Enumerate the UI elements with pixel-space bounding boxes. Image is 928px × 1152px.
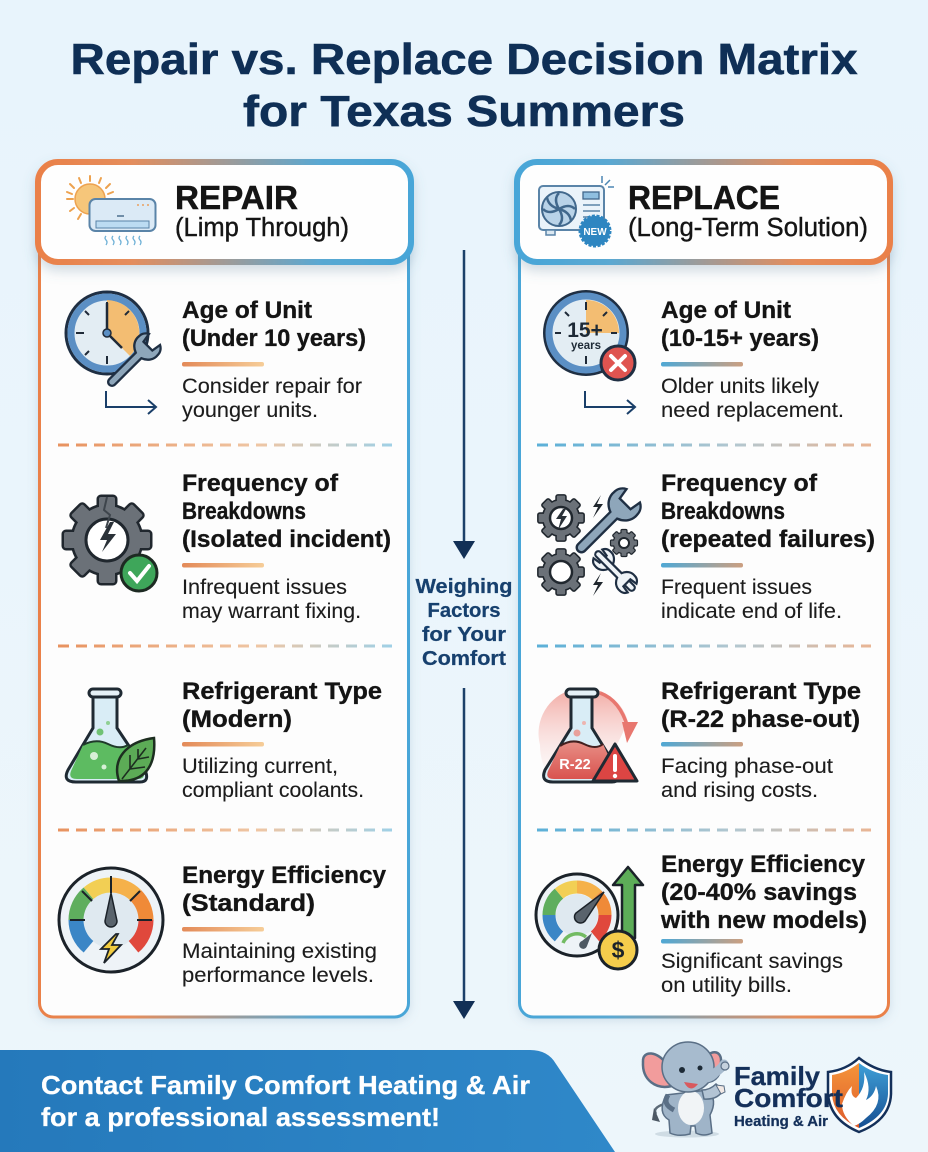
footer banner: Contact Family Comfort Heating & Air — [41, 1070, 530, 1100]
icon: new outdoor unit — [539, 176, 614, 246]
title — [70, 35, 858, 136]
icon: gear with check — [64, 497, 157, 591]
text: refrigerant: (R-22 phase-out) — [661, 706, 860, 733]
text: refrigerant — [661, 678, 861, 802]
text: energy: (Standard) — [182, 890, 315, 917]
text: refrigerant: compliant coolants. — [182, 779, 364, 802]
panel: repair — [38, 162, 411, 1017]
center label — [416, 576, 512, 670]
row: frequency, replace — [539, 470, 875, 623]
text: frequency: Frequency of — [182, 470, 339, 497]
text: age of unit: younger units. — [182, 399, 318, 422]
icon: clock with wrench — [66, 292, 164, 394]
replace heading: REPLACE — [628, 179, 780, 216]
logo wordmark: Family — [734, 1061, 821, 1091]
text: age — [661, 297, 844, 422]
icon: gears and wrenches — [539, 484, 645, 597]
row: age of unit, replace — [543, 290, 844, 422]
text: refrigerant: (Modern) — [182, 706, 292, 733]
replace header card — [517, 162, 890, 262]
text: age of unit: Age of Unit — [182, 297, 312, 324]
row: energy, replace — [536, 851, 867, 997]
icon: gauge with savings — [536, 867, 643, 969]
icon: gauge with savings: $ — [612, 937, 625, 963]
text: age of unit: Consider repair for — [182, 375, 362, 398]
text: frequency — [182, 470, 391, 623]
center label: for Your — [422, 624, 506, 646]
text: age: (10-15+ years) — [661, 325, 819, 352]
text: frequency: indicate end of life. — [661, 600, 842, 623]
elephant mascot — [643, 1042, 729, 1138]
logo shield — [828, 1058, 891, 1132]
repair heading: REPAIR — [175, 179, 298, 216]
center arrow: upper — [453, 250, 475, 559]
text: energy — [182, 862, 386, 987]
row: refrigerant type, repair — [66, 678, 382, 802]
arrow — [106, 391, 156, 414]
center label: Factors — [428, 600, 500, 622]
text: frequency: (repeated failures) — [661, 526, 875, 553]
text: refrigerant: Utilizing current, — [182, 755, 338, 778]
text: energy: with new models) — [660, 907, 867, 934]
icon: R-22 flask with warning — [539, 688, 638, 782]
logo wordmark — [734, 1061, 843, 1130]
title: for Texas Summers — [243, 87, 685, 136]
text: energy: (20-40% savings — [661, 879, 857, 906]
text: energy: Energy Efficiency — [182, 862, 386, 889]
text: frequency: Frequent issues — [661, 576, 812, 599]
repair subheading: (Limp Through) — [175, 214, 349, 242]
text: energy: Maintaining existing — [182, 940, 377, 963]
text: energy: Energy Efficiency — [661, 851, 865, 878]
text: energy: performance levels. — [182, 964, 374, 987]
repair header card — [38, 162, 411, 262]
text: frequency: Breakdowns — [182, 498, 306, 525]
footer banner — [0, 1050, 615, 1152]
arrow — [585, 391, 635, 414]
icon: flask with leaf — [66, 689, 154, 782]
text: frequency: Breakdowns — [661, 498, 785, 525]
text: frequency: (Isolated incident) — [182, 526, 391, 553]
icon: R-22 flask with warning: R-22 — [559, 757, 591, 773]
row: frequency of breakdowns, repair — [64, 470, 391, 623]
text: refrigerant: Refrigerant Type — [182, 678, 382, 705]
text: age of unit — [182, 297, 366, 422]
icon: sun and air conditioner — [67, 176, 156, 245]
title: Repair vs. Replace Decision Matrix — [70, 35, 858, 84]
text: age: Older units likely — [661, 375, 820, 398]
logo wordmark: Comfort — [734, 1083, 843, 1113]
text: energy: on utility bills. — [661, 974, 792, 997]
panel: replace — [517, 162, 890, 1017]
text: refrigerant: Facing phase-out — [661, 755, 833, 778]
text: energy — [660, 851, 867, 997]
text: refrigerant: Refrigerant Type — [661, 678, 861, 705]
row: energy efficiency, repair — [59, 862, 386, 987]
row: age of unit, repair — [66, 292, 366, 422]
text: frequency: may warrant fixing. — [182, 600, 361, 623]
text: refrigerant: and rising costs. — [661, 779, 818, 802]
text: energy: Significant savings — [661, 950, 843, 973]
center label: Weighing — [416, 576, 512, 598]
text: age: Age of Unit — [661, 297, 791, 324]
icon: new outdoor unit: NEW — [583, 227, 607, 238]
text: frequency: Infrequent issues — [182, 576, 347, 599]
center arrow: lower — [453, 688, 475, 1019]
text: age: need replacement. — [661, 399, 844, 422]
text: age of unit: (Under 10 years) — [182, 325, 366, 352]
row: refrigerant, replace — [539, 678, 861, 802]
logo — [643, 1042, 891, 1138]
logo wordmark: Heating & Air — [734, 1114, 828, 1130]
icon: clock with x: years — [571, 340, 601, 352]
text: refrigerant — [182, 678, 382, 802]
text: frequency: Frequency of — [661, 470, 818, 497]
icon: clock with x: 15+ — [567, 319, 603, 342]
icon: gauge with bolt — [59, 868, 163, 972]
replace subheading: (Long-Term Solution) — [628, 214, 868, 242]
footer banner: for a professional assessment! — [41, 1102, 440, 1132]
icon: clock with x — [543, 290, 635, 380]
center label: Comfort — [422, 648, 506, 670]
text: frequency — [661, 470, 875, 623]
